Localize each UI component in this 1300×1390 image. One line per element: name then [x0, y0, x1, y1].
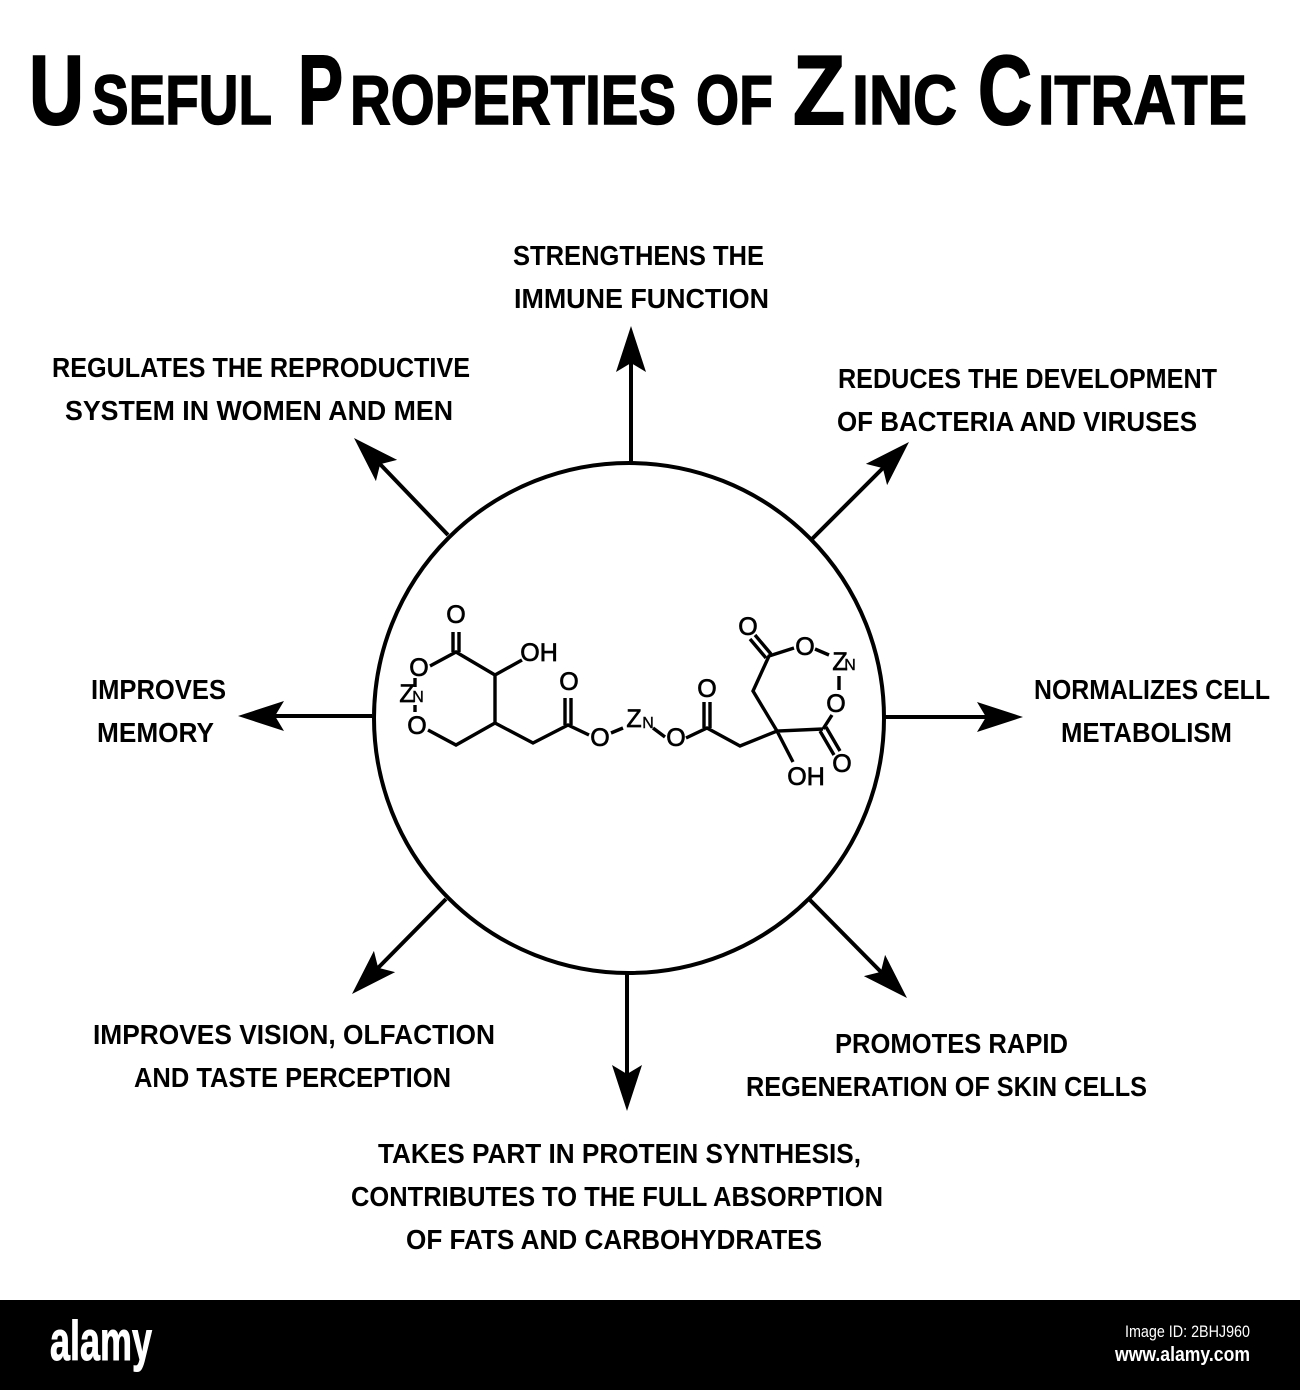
label: regulates the reproductive system	[52, 352, 470, 426]
label: promotes skin regeneration: PROMOTES RAPID	[835, 1028, 1068, 1059]
left fragment atom labels: O	[409, 654, 429, 682]
right fragment atom labels: OH	[787, 763, 825, 791]
image id: Image ID: 2BHJ960	[1125, 1322, 1250, 1341]
label: normalizes cell metabolism: METABOLISM	[1061, 717, 1232, 748]
label: improves vision, olfaction and taste: AND TASTE PERCEPTION	[134, 1062, 451, 1093]
central circle	[374, 463, 884, 973]
label: improves memory	[91, 674, 226, 748]
label: normalizes cell metabolism	[1034, 674, 1270, 748]
label: reduces bacteria and viruses	[837, 363, 1217, 437]
left fragment atom labels: O	[590, 724, 610, 752]
right fragment atom labels: O	[666, 724, 686, 752]
right fragment atom labels: N	[844, 657, 856, 674]
arrow: down	[612, 974, 642, 1111]
label: protein synthesis and absorption: CONTRIBUTES TO THE FULL ABSORPTION	[351, 1181, 883, 1212]
right fragment bonds	[653, 635, 840, 762]
label: reduces bacteria and viruses: REDUCES THE DEVELOPMENT	[838, 363, 1217, 394]
arrow: lower left	[341, 899, 446, 1005]
title: Z	[793, 35, 845, 145]
label: improves memory: MEMORY	[97, 717, 214, 748]
left fragment atom labels: O	[407, 712, 427, 740]
footer watermark bar	[0, 1300, 1300, 1390]
central zinc label: Z	[626, 705, 642, 733]
label: normalizes cell metabolism: NORMALIZES CELL	[1034, 674, 1270, 705]
central zinc label: N	[642, 715, 654, 732]
left fragment atom labels: O	[559, 668, 579, 696]
label: reduces bacteria and viruses: OF BACTERIA AND VIRUSES	[837, 406, 1197, 437]
left fragment bonds	[415, 632, 623, 745]
arrow: right	[885, 702, 1023, 732]
arrow: lower right	[809, 899, 918, 1009]
left fragment atom labels	[399, 601, 610, 752]
arrow: upper left	[343, 427, 448, 535]
left fragment atom labels: O	[446, 601, 466, 629]
label: improves vision, olfaction and taste	[93, 1019, 495, 1093]
title: SEFUL	[92, 61, 272, 139]
zinc citrate molecule	[399, 601, 856, 791]
website: www.alamy.com	[1114, 1344, 1250, 1366]
left fragment atom labels: Z	[399, 680, 415, 708]
arrow: left	[238, 701, 372, 731]
right fragment atom labels	[666, 613, 856, 791]
label: regulates the reproductive system: SYSTEM IN WOMEN AND MEN	[65, 395, 453, 426]
label: improves memory: IMPROVES	[91, 674, 226, 705]
title: ITRATE	[1038, 61, 1247, 139]
title: U	[29, 35, 84, 145]
right fragment atom labels: O	[795, 633, 815, 661]
title: P	[298, 35, 343, 145]
label: protein synthesis and absorption: TAKES PART IN PROTEIN SYNTHESIS,	[378, 1138, 861, 1169]
left fragment atom labels: OH	[520, 639, 558, 667]
title: C	[978, 35, 1032, 145]
title: ROPERTIES	[350, 61, 676, 139]
right fragment atom labels: O	[697, 675, 717, 703]
left fragment atom labels: N	[412, 689, 424, 706]
label: strengthens the immune function: STRENGTHENS THE	[513, 240, 764, 271]
right fragment atom labels: O	[832, 750, 852, 778]
arrow: upper right	[812, 431, 920, 539]
label: promotes skin regeneration: REGENERATION OF SKIN CELLS	[746, 1071, 1147, 1102]
title: OF	[696, 61, 773, 139]
central zinc label	[626, 705, 654, 733]
label: strengthens the immune function: IMMUNE FUNCTION	[514, 283, 769, 314]
label: promotes skin regeneration	[746, 1028, 1147, 1102]
label: improves vision, olfaction and taste: IMPROVES VISION, OLFACTION	[93, 1019, 495, 1050]
title: INC	[852, 61, 957, 139]
arrow: up	[616, 326, 646, 462]
label: regulates the reproductive system: REGULATES THE REPRODUCTIVE	[52, 352, 470, 383]
right fragment atom labels: O	[826, 690, 846, 718]
right fragment atom labels: O	[738, 613, 758, 641]
label: protein synthesis and absorption	[351, 1138, 883, 1255]
alamy logo: alamy	[50, 1309, 152, 1372]
title	[29, 35, 1247, 145]
label: protein synthesis and absorption: OF FATS AND CARBOHYDRATES	[406, 1224, 822, 1255]
label: strengthens the immune function	[513, 240, 769, 314]
right fragment atom labels: Z	[832, 648, 848, 676]
